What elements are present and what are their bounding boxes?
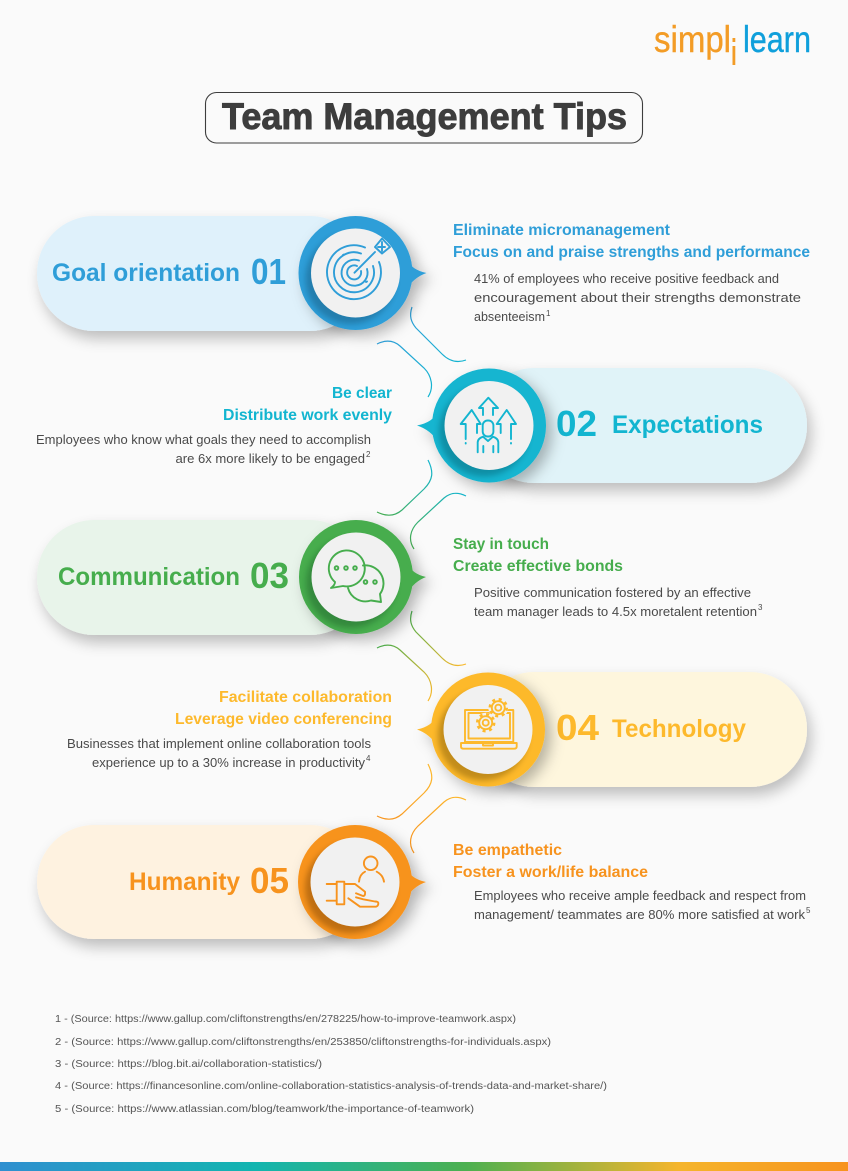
body copy: 5 (806, 906, 811, 915)
footnotes: sources: 5 - (Source: https://www.atlassian.com/blog/teamwork/the-importance-of-teamwork) (55, 1104, 474, 1115)
body copy: absenteeism (474, 310, 545, 324)
footnotes: sources (55, 1014, 607, 1115)
body copy (474, 272, 801, 324)
number ring with pointer (299, 520, 426, 634)
connector: 03 to 04 inner (377, 645, 431, 701)
text block: goal orientation (453, 222, 810, 324)
pill label: Expectations (612, 411, 763, 439)
heading lines: Create effective bonds (453, 558, 623, 575)
number 02: 02 (556, 403, 597, 444)
heading lines (453, 842, 648, 881)
icon: chat bubbles (329, 550, 384, 602)
body copy (474, 586, 763, 619)
text block: expectations (36, 385, 392, 466)
body copy: are 6x more likely to be engaged (176, 452, 365, 466)
body copy: team manager leads to 4.5x moretalent retention (474, 605, 757, 619)
number 05: 05 (250, 860, 289, 901)
icon: hand supporting person (327, 856, 384, 907)
heading lines: Leverage video conferencing (175, 711, 392, 728)
pill background (37, 216, 367, 331)
icon: person with three arrows (461, 398, 516, 452)
text block: technology (67, 689, 392, 770)
pill label: Goal orientation (52, 259, 240, 287)
number ring with pointer (298, 216, 426, 330)
title: Team Management Tips (222, 96, 627, 137)
heading lines: Eliminate micromanagement (453, 222, 670, 239)
bottom gradient bar (0, 1162, 848, 1171)
body copy: Positive communication fostered by an effective (474, 586, 751, 600)
number ring with pointer (298, 825, 426, 939)
panel: humanity (37, 825, 426, 939)
body copy: encouragement about their strengths demonstrate (474, 291, 801, 305)
connector: 02 to 03 inner (377, 460, 432, 515)
footnotes: sources: 2 - (Source: https://www.gallup.com/cliftonstrengths/en/253850/cliftonstrengths-for-individuals.aspx) (55, 1037, 551, 1048)
number 01: 01 (251, 251, 286, 292)
body copy: management/ teammates are 80% more satisfied at work (474, 908, 806, 922)
heading lines: Stay in touch (453, 536, 549, 553)
heading lines (453, 536, 623, 575)
logo: Simplilearn (654, 19, 811, 65)
heading lines: Be empathetic (453, 842, 562, 859)
body copy: 1 (546, 309, 551, 318)
pill label: Humanity (129, 868, 240, 896)
heading lines: Distribute work evenly (223, 407, 392, 424)
pill background (477, 672, 807, 787)
heading lines: Foster a work/life balance (453, 864, 648, 881)
body copy: 3 (758, 603, 763, 612)
footnotes: sources: 3 - (Source: https://blog.bit.ai/collaboration-statistics/) (55, 1059, 322, 1070)
body copy: 2 (366, 450, 371, 459)
connector: 01 to 02 inner (377, 341, 431, 397)
heading lines (175, 689, 392, 728)
body copy: Businesses that implement online collaboration tools (67, 737, 371, 751)
number ring with pointer (417, 672, 545, 786)
footnotes: sources: 1 - (Source: https://www.gallup.com/cliftonstrengths/en/278225/how-to-improve-teamwork.aspx) (55, 1014, 516, 1025)
heading lines: Be clear (332, 385, 392, 402)
panel: expectations (417, 368, 807, 483)
body copy: experience up to a 30% increase in productivity (92, 756, 366, 770)
number ring with pointer (417, 368, 546, 482)
pill label: Technology (612, 715, 746, 743)
text block: humanity (453, 842, 811, 922)
icon: target with arrow (327, 238, 390, 299)
body copy: 41% of employees who receive positive feedback and (474, 272, 779, 286)
body copy (36, 433, 371, 466)
panel: technology (417, 672, 807, 787)
connector: 02 to 03 outer (411, 493, 466, 549)
pill background (477, 368, 807, 483)
icon: laptop with gears (461, 698, 517, 749)
panel: communication (37, 520, 426, 635)
body copy (67, 737, 371, 770)
body copy: Employees who know what goals they need to accomplish (36, 433, 371, 447)
body copy: 4 (366, 754, 371, 763)
text block: communication (453, 536, 763, 619)
body copy: Employees who receive ample feedback and respect from (474, 889, 806, 903)
heading lines: Facilitate collaboration (219, 689, 392, 706)
number 03: 03 (250, 555, 289, 596)
pill label: Communication (58, 563, 240, 591)
connector: 04 to 05 inner (377, 764, 432, 819)
logo: Simplilearn: simpl (654, 19, 731, 60)
panel: goal orientation (37, 216, 426, 331)
connector: 03 to 04 outer (411, 611, 466, 666)
number 04: 04 (556, 707, 599, 748)
connector: 04 to 05 outer (411, 797, 466, 853)
footnotes: sources: 4 - (Source: https://financesonline.com/online-collaboration-statistics-analysis-of-trends-data-and-market-share/) (55, 1081, 607, 1092)
pill background (37, 520, 367, 635)
heading lines: Focus on and praise strengths and performance (453, 244, 810, 261)
heading lines (223, 385, 392, 424)
body copy (474, 889, 811, 922)
logo: Simplilearn: learn (743, 19, 811, 60)
heading lines (453, 222, 810, 261)
pill background (37, 825, 367, 939)
connector: 01 to 02 outer (411, 307, 466, 362)
